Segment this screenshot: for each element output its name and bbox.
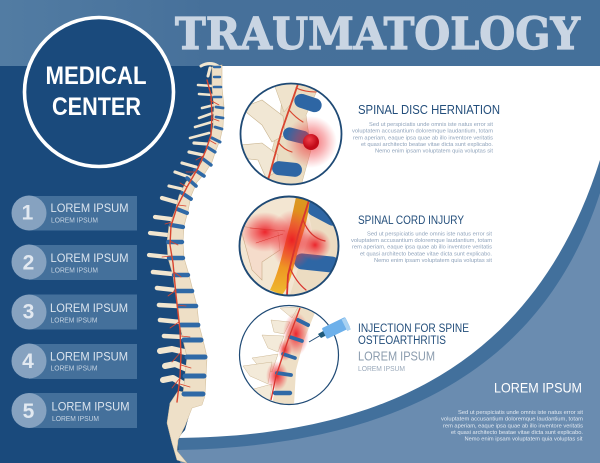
injury glow: [242, 213, 287, 251]
icon: syringe: [309, 317, 351, 342]
vertebrae: [272, 306, 316, 405]
illustration: spinal cord injury: [240, 196, 344, 296]
list item 2: LOREM IPSUM: [51, 266, 98, 274]
text block: herniation description: Nemo enim ipsam voluptatem quia voluptas sit: [375, 149, 493, 155]
list item 5: [12, 393, 137, 428]
list item 3: [12, 294, 137, 330]
artery: [268, 84, 316, 180]
processes: [243, 307, 298, 400]
badge text: MEDICAL: [46, 62, 146, 90]
text block: cord injury description: [351, 231, 492, 264]
list item 2: LOREM IPSUM: [50, 251, 128, 265]
header band: [0, 0, 600, 66]
discs: [294, 94, 322, 112]
list item 3: LOREM IPSUM: [50, 301, 128, 315]
list item 1: LOREM IPSUM: [51, 216, 98, 224]
injury glow: [283, 312, 309, 356]
vertebral column: [167, 65, 224, 394]
bottom panel text block: [441, 410, 583, 443]
text block: cord injury description: rem aperiam, eaque ipsa quae ab illo inventore veritatis: [352, 245, 492, 251]
list item 3: LOREM IPSUM: [50, 316, 98, 324]
intervertebral discs: [168, 67, 223, 394]
text block: cord injury description: Nemo enim ipsam voluptatem quia voluptas sit: [374, 258, 492, 264]
vertebra: [290, 213, 338, 294]
spinal cord: [270, 197, 310, 295]
subheading gray: LOREM IPSUM: [358, 350, 435, 364]
disc bottom: [294, 253, 336, 272]
artery: [271, 308, 300, 400]
illustration: spine injection: [240, 306, 340, 406]
list item 3: 3: [23, 300, 34, 324]
medical center badge: CENTER: [52, 93, 141, 121]
heading: spinal disc herniation: SPINAL DISC HERNIATION: [358, 103, 500, 117]
list item 4: [12, 344, 137, 379]
list item 1: [12, 196, 137, 230]
text block: cord injury description: et quasi architecto beatae vitae dicta sunt explicabo.: [360, 251, 492, 257]
text block: herniation description: voluptatem accusantium doloremque laudantium, totam: [352, 129, 493, 135]
text block: cord injury description: Sed ut perspiciatis unde omnis iste natus error sit: [367, 231, 492, 237]
text block: herniation description: rem aperiam, eaque ipsa quae ab illo inventore veritatis: [353, 135, 493, 141]
illustration: spinal disc herniation: [240, 83, 342, 186]
herniation glow: [286, 118, 336, 166]
list item 5: LOREM IPSUM: [52, 400, 130, 414]
heading: injection for spine osteoarthritis: [358, 323, 469, 347]
heading: injection for spine osteoarthritis: INJECTION FOR SPINE: [358, 323, 469, 335]
list item 2: [12, 244, 137, 280]
medical center badge: [24, 18, 174, 166]
bottom curved band: [177, 155, 600, 463]
list item 4: LOREM IPSUM: [50, 350, 128, 364]
list item 1: 1: [22, 202, 34, 224]
bottom panel heading: LOREM IPSUM: [494, 380, 582, 396]
list item 2: 2: [23, 252, 34, 274]
list item 4: 4: [22, 350, 34, 373]
text block: herniation description: Sed ut perspiciatis unde omnis iste natus error sit: [369, 122, 493, 128]
list item 1: LOREM IPSUM: [50, 201, 128, 215]
heading: injection for spine osteoarthritis: OSTEOARTHRITIS: [358, 335, 446, 347]
vertebra body: [267, 85, 317, 184]
text block: herniation description: [352, 122, 493, 155]
bottom panel text block: Sed ut perspiciatis unde omnis iste natus error sit: [458, 410, 583, 416]
bottom panel text block: et quasi architecto beatae vitae dicta sunt explicabo.: [451, 430, 583, 436]
small subheading gray: LOREM IPSUM: [358, 364, 405, 373]
bottom light blue panel: [177, 193, 600, 463]
list item 4: LOREM IPSUM: [50, 364, 98, 372]
text block: herniation description: et quasi architecto beatae vitae dicta sunt explicabo.: [361, 142, 493, 148]
bottom panel text block: voluptatem accusantium doloremque laudantium, totam: [441, 417, 583, 423]
text block: cord injury description: voluptatem accusantium doloremque laudantium, totam: [351, 238, 492, 244]
disc top: [308, 202, 334, 226]
list item 5: LOREM IPSUM: [52, 414, 99, 423]
bottom panel text block: Nemo enim ipsam voluptatem quia voluptas sit: [464, 437, 583, 443]
heading: spinal cord injury: SPINAL CORD INJURY: [358, 215, 464, 227]
discs: [275, 320, 308, 393]
list item 5: 5: [23, 400, 35, 423]
processes: [241, 100, 285, 142]
white content panel: [175, 66, 600, 438]
bottom panel text block: rem aperiam, eaque ipsa quae ab illo inventore veritatis: [443, 423, 583, 429]
title: TRAUMATOLOGY: [175, 9, 581, 60]
artery: [250, 197, 325, 295]
spine processes: [149, 64, 218, 385]
spinal artery: [162, 80, 219, 402]
sacrum: [167, 391, 205, 463]
spine illustration: [149, 64, 224, 463]
